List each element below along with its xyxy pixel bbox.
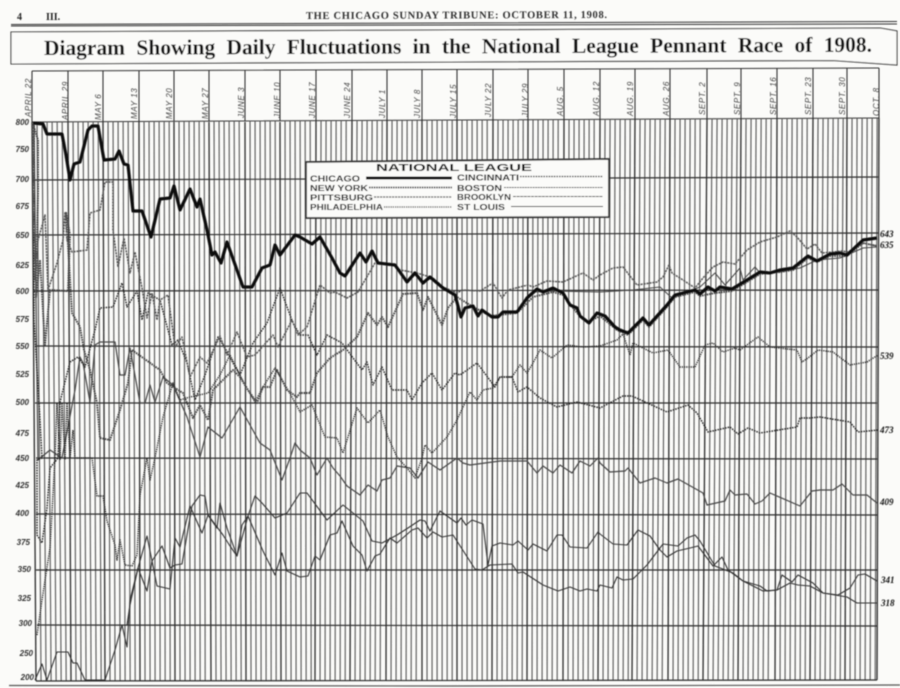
date header row: SEPT. 30 xyxy=(838,77,847,115)
y axis labels: 750 xyxy=(16,145,30,154)
y axis labels: 625 xyxy=(16,261,30,270)
date header row: SEPT. 2 xyxy=(698,82,707,115)
title banner: Diagram Showing Daily Fluctuations in the National League Pennant Race of 1908. xyxy=(44,33,872,60)
end-of-season values: 539 xyxy=(880,351,894,361)
line: late-season contender branch xyxy=(535,247,877,298)
newspaper masthead: THE CHICAGO SUNDAY TRIBUNE: OCTOBER 11, 1908. xyxy=(306,10,607,22)
date header row: SEPT. 23 xyxy=(804,77,813,115)
end-of-season values: 341 xyxy=(880,575,894,585)
line: Boston xyxy=(34,125,877,506)
y axis labels xyxy=(15,118,35,682)
date header row: JULY 8 xyxy=(413,89,422,119)
line: St Louis xyxy=(35,503,877,680)
y axis labels: 325 xyxy=(18,594,32,603)
y axis labels: 800 xyxy=(16,118,30,127)
y axis labels: 400 xyxy=(15,509,30,518)
date header row: SEPT. 16 xyxy=(769,77,778,115)
date header row: AUG. 5 xyxy=(556,86,565,117)
line: Brooklyn xyxy=(127,493,877,625)
legend: National League: CINCINNATI xyxy=(457,174,519,182)
date header row: MAY 20 xyxy=(165,88,174,119)
y axis labels: 350 xyxy=(18,565,32,574)
date header row: JUNE 3 xyxy=(237,87,246,119)
legend: National League: NEW YORK xyxy=(310,184,368,193)
legend: National League: NATIONAL LEAGUE xyxy=(376,162,532,174)
legend: National League xyxy=(306,159,609,218)
y axis labels: 700 xyxy=(16,175,30,184)
line: New York xyxy=(33,124,877,440)
date header row: OCT. 8 xyxy=(872,87,881,116)
legend: National League: ST LOUIS xyxy=(457,203,506,212)
newspaper masthead: 4 xyxy=(17,12,22,23)
end-of-season values xyxy=(879,229,895,608)
newspaper masthead: III. xyxy=(46,12,61,23)
newspaper masthead xyxy=(11,10,897,26)
date header row: AUG. 26 xyxy=(662,81,671,117)
date header row: JULY 29 xyxy=(521,83,530,118)
legend: National League: PITTSBURG xyxy=(310,194,373,202)
date header row: SEPT. 9 xyxy=(733,82,742,115)
y axis labels: 250 xyxy=(19,649,34,658)
date header row: AUG. 12 xyxy=(592,81,601,117)
date header row: MAY 6 xyxy=(94,94,103,120)
y axis labels: 675 xyxy=(16,202,30,211)
date header row: MAY 27 xyxy=(201,88,210,119)
date header row: MAY 13 xyxy=(130,88,139,119)
date header row: JULY 22 xyxy=(484,83,493,118)
y axis labels: 525 xyxy=(16,370,30,379)
y axis labels: 475 xyxy=(15,429,30,438)
line: Cincinnati xyxy=(34,125,878,543)
line: Pittsburg xyxy=(33,124,877,377)
y axis labels: 300 xyxy=(19,619,33,628)
end-of-season values: 643 xyxy=(880,229,894,239)
legend: National League: BOSTON xyxy=(457,184,502,193)
end-of-season values: 409 xyxy=(879,497,894,507)
line: Chicago xyxy=(33,123,877,333)
date header row: APRIL 22 xyxy=(24,78,33,118)
date header row: JUNE 10 xyxy=(273,82,282,119)
date header row: JUNE 24 xyxy=(343,82,352,119)
legend: National League: CHICAGO xyxy=(310,174,360,184)
chart grid xyxy=(32,112,879,687)
legend: National League: PHILADELPHIA xyxy=(310,203,383,212)
y axis labels: 200 xyxy=(20,673,35,682)
end-of-season values: 635 xyxy=(880,240,894,250)
y axis labels: 600 xyxy=(16,287,30,296)
date header row: JULY 15 xyxy=(449,84,458,119)
date header row: APRIL 29 xyxy=(61,81,70,121)
date header row xyxy=(24,68,881,122)
end-of-season values: 318 xyxy=(880,598,895,608)
date header row: JUNE 17 xyxy=(308,82,317,119)
y axis labels: 575 xyxy=(16,315,30,324)
end-of-season values: 473 xyxy=(879,425,894,435)
y axis labels: 425 xyxy=(15,481,30,490)
line: Philadelphia xyxy=(37,334,878,635)
title banner xyxy=(11,28,897,65)
y axis labels: 450 xyxy=(15,454,30,463)
y axis labels: 650 xyxy=(16,231,30,240)
y axis labels: 500 xyxy=(16,398,30,407)
legend: National League: BROOKLYN xyxy=(457,193,511,202)
date header row: AUG. 19 xyxy=(626,81,635,117)
y axis labels: 550 xyxy=(16,342,30,351)
y axis labels: 375 xyxy=(17,538,31,547)
date header row: JULY 1 xyxy=(378,89,387,119)
